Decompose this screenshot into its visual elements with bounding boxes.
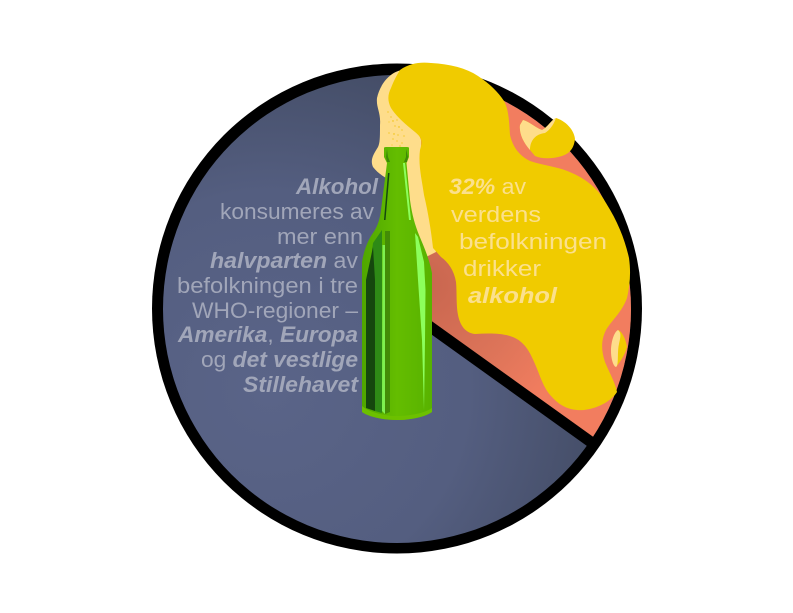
left bright highlight (382, 245, 385, 414)
text: left statement (177, 174, 379, 397)
text: right statement (449, 174, 607, 308)
neck ring shadow (386, 149, 408, 162)
right bright highlight (415, 233, 426, 410)
bottle base rim (362, 406, 432, 420)
text: right statement: verdens (451, 202, 541, 227)
text: right statement: befolkningen (459, 229, 607, 254)
text: right statement: alkohol (468, 283, 558, 308)
pale foam (372, 70, 436, 260)
dark glass panel (366, 247, 375, 411)
text: left statement: Stillehavet (243, 372, 360, 397)
text: right statement: 32% av (449, 174, 526, 199)
drop highlight (520, 118, 556, 150)
pie slice: majority blue (163, 75, 631, 543)
infographic: pie chart with bottle (152, 62, 642, 554)
text: left statement: WHO-regioner – (192, 298, 359, 323)
green bottle (362, 147, 432, 420)
pie ring (152, 64, 642, 554)
olive panel (385, 231, 390, 414)
foam bubbles (387, 111, 405, 147)
slice divider (397, 303, 593, 444)
mid green panel (366, 230, 382, 413)
text: left statement: mer enn (277, 224, 363, 249)
text: left statement: Amerika, Europa (177, 322, 358, 347)
yellow beer splash (388, 63, 630, 410)
small drop highlight (611, 330, 620, 367)
yellow drop lower right (611, 330, 627, 367)
text: left statement: halvparten av (210, 248, 358, 273)
yellow drop upper right (520, 118, 575, 158)
text: right statement: drikker (463, 256, 541, 281)
neck highlight (403, 163, 411, 220)
bottle silhouette (362, 147, 432, 420)
pie slice: orange 32% (420, 100, 631, 437)
text: left statement: befolkningen i tre (177, 273, 358, 298)
text: left statement: konsumeres av (220, 199, 374, 224)
text: left statement: Alkohol (295, 174, 379, 199)
text: left statement: og det vestlige (201, 347, 358, 372)
neck shadow (384, 173, 390, 220)
